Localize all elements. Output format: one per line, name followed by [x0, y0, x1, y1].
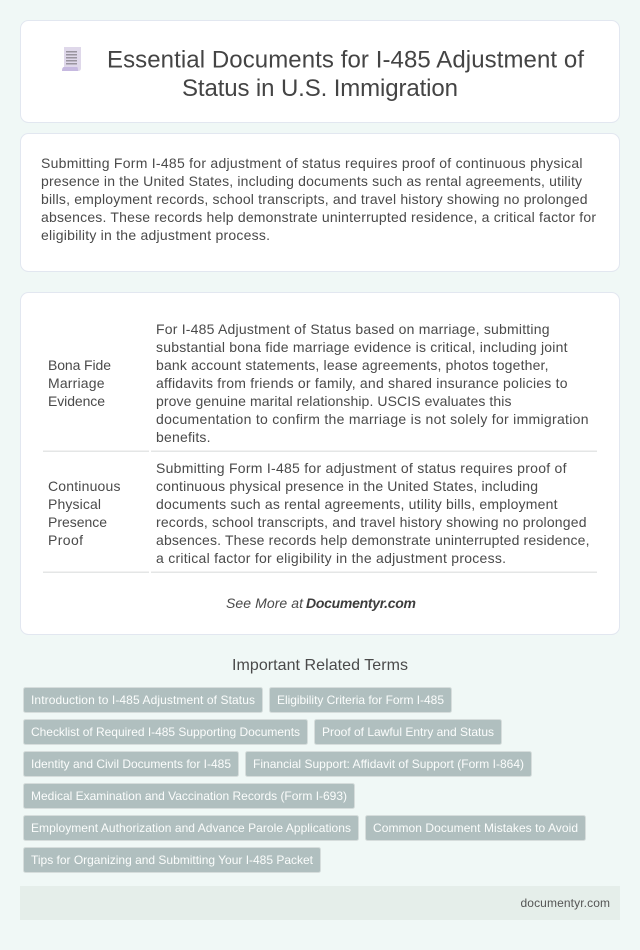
footer: documentyr.com	[520, 896, 610, 910]
title	[107, 46, 584, 102]
row label: Continuous Physical Presence Proof: Physical	[48, 496, 101, 512]
row label: Continuous Physical Presence Proof: Presence	[48, 514, 107, 530]
row text: marriage evidence: prove genuine marital relationship. USCIS evaluates this	[156, 393, 512, 409]
row label: Bona Fide Marriage Evidence: Bona Fide	[48, 357, 111, 373]
related term tags: Proof of Lawful Entry and Status	[322, 725, 494, 739]
title: Essential Documents for I-485 Adjustment of	[107, 46, 584, 74]
row text: marriage evidence	[156, 321, 588, 445]
row label: Bona Fide Marriage Evidence: Marriage	[48, 375, 105, 391]
footer	[20, 886, 620, 920]
heading: related terms: Important Related Terms	[232, 657, 408, 674]
row text: marriage evidence: affidavits from friends or family, and shared insurance policies to	[156, 375, 568, 391]
panel: introduction	[20, 134, 620, 272]
intro text: bills, employment records, school transcripts, and travel history showing no prolonged	[41, 191, 588, 207]
row text: physical presence: absences. These records help demonstrate uninterrupted residence,	[156, 532, 590, 548]
row text: physical presence: records, school transcripts, and travel history showing no prolonged	[156, 514, 586, 530]
row text: marriage evidence: documentation to confirm the marriage is not solely for immigration	[156, 411, 588, 427]
row text: physical presence: Submitting Form I-485 for adjustment of status requires proof of	[156, 460, 567, 476]
related term tags: Identity and Civil Documents for I-485	[31, 757, 231, 771]
intro text: presence in the United States, including documents such as rental agreements, utility	[41, 173, 582, 189]
header card	[20, 20, 620, 122]
intro text: Submitting Form I-485 for adjustment of status requires proof of continuous physical	[41, 155, 582, 171]
row text: physical presence: a critical factor for eligibility in the adjustment process.	[156, 550, 506, 566]
see more link	[226, 595, 416, 611]
related term tags: Tips for Organizing and Submitting Your I-485 Packet	[31, 853, 314, 867]
row label: Continuous Physical Presence Proof: Continuous	[48, 478, 120, 494]
intro text: eligibility in the adjustment process.	[41, 227, 270, 243]
row text: marriage evidence: bank account statements, lease agreements, photos together,	[156, 357, 548, 373]
row text: physical presence: continuous physical presence in the United States, including	[156, 478, 538, 494]
related term tags: Introduction to I-485 Adjustment of Status	[31, 693, 255, 707]
intro text	[41, 155, 596, 243]
related term tags: Employment Authorization and Advance Parole Applications	[31, 821, 351, 835]
related term tags	[24, 688, 586, 872]
row label: Continuous Physical Presence Proof	[48, 478, 120, 548]
panel: evidence table	[20, 292, 620, 634]
related term tags: Common Document Mistakes to Avoid	[373, 821, 578, 835]
title: Status in U.S. Immigration	[182, 75, 458, 102]
related term tags: Eligibility Criteria for Form I-485	[277, 693, 444, 707]
row text: marriage evidence: benefits.	[156, 429, 210, 445]
row label: Continuous Physical Presence Proof: Proof	[48, 532, 83, 548]
intro text: absences. These records help demonstrate uninterrupted residence, a critical factor for	[41, 209, 596, 225]
related term tags: Medical Examination and Vaccination Records (Form I-693)	[31, 789, 347, 803]
row text: physical presence	[156, 460, 590, 566]
row label: Bona Fide Marriage Evidence	[48, 357, 111, 409]
see more link: See More at	[226, 595, 304, 611]
row text: physical presence: documents such as rental agreements, utility bills, employment	[156, 496, 558, 512]
related term tags: Financial Support: Affidavit of Support (Form I-864)	[253, 757, 524, 771]
related term tags: Checklist of Required I-485 Supporting Documents	[31, 725, 300, 739]
row label: Bona Fide Marriage Evidence: Evidence	[48, 393, 105, 409]
see more link: Documentyr.com	[306, 595, 416, 611]
row text: marriage evidence: substantial bona fide marriage evidence is critical, including joint	[156, 339, 568, 355]
icon: document scroll	[62, 47, 81, 71]
row text: marriage evidence: For I-485 Adjustment of Status based on marriage, submitting	[156, 321, 550, 337]
